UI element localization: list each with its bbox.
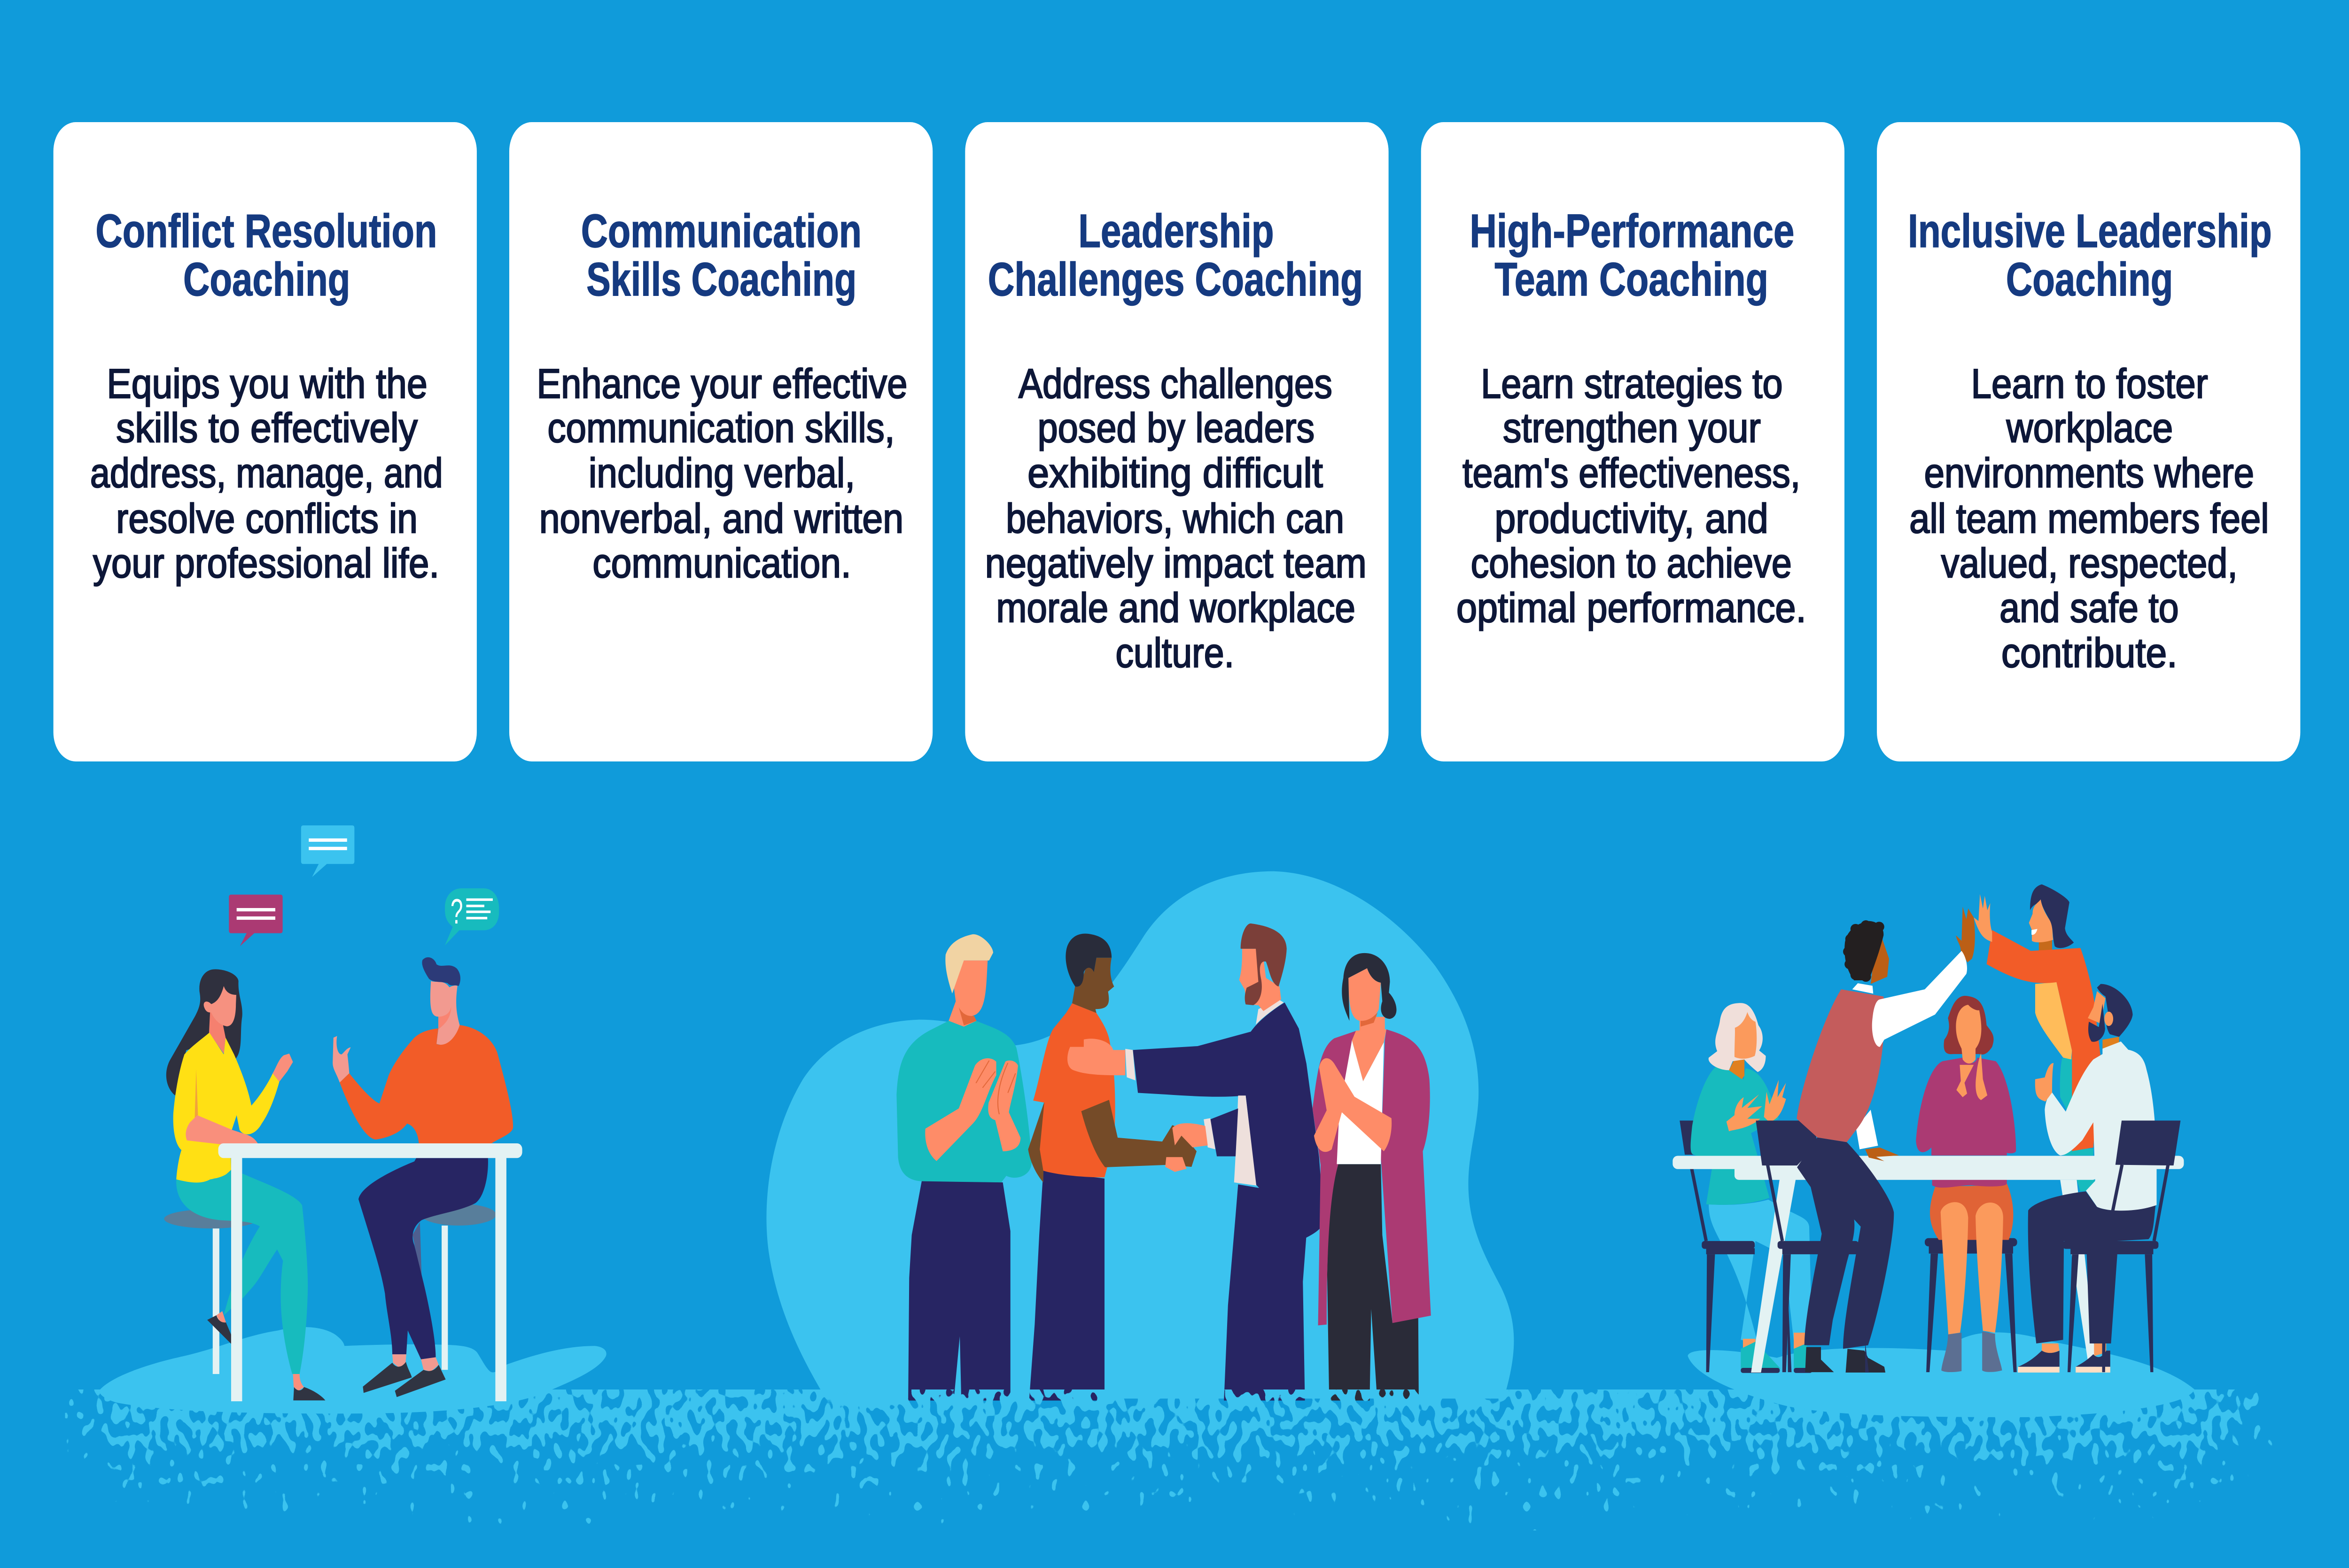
heading: leadership challenges coaching <box>988 204 1363 305</box>
man seated right, white shirt <box>2018 984 2180 1373</box>
table rear leg <box>2060 1180 2097 1373</box>
woman with magenta cardigan <box>1313 953 1431 1400</box>
man high-fiving, red vest <box>1756 907 1975 1373</box>
text: high-performance description <box>1456 360 1806 631</box>
man with orange shirt shaking hands <box>1028 933 1197 1400</box>
text: conflict resolution description: skills to effectively <box>116 404 418 451</box>
text: leadership challenges description: behaviors, which can <box>1006 495 1344 542</box>
heading: conflict resolution coaching: Coaching <box>183 253 350 305</box>
text: communication skills description: Enhance your effective <box>537 360 908 407</box>
text: communication skills description: nonverbal, and written <box>539 495 903 542</box>
text: high-performance description: team's effectiveness, <box>1462 450 1800 496</box>
heading: conflict resolution coaching: Conflict Resolution <box>95 204 437 257</box>
heading: inclusive leadership coaching: Inclusive Leadership <box>1908 204 2272 257</box>
text: leadership challenges description: exhibiting difficult <box>1027 450 1323 496</box>
text: leadership challenges description <box>985 360 1367 676</box>
speech bubble: purple <box>229 894 283 946</box>
text: conflict resolution description: Equips you with the <box>107 360 428 407</box>
panel: communication skills coaching <box>509 122 933 761</box>
speech bubble: blue <box>301 825 354 877</box>
text: conflict resolution description: resolve conflicts in <box>116 495 418 542</box>
long table top <box>1672 1156 2184 1373</box>
woman seated, yellow sweater <box>164 969 325 1400</box>
man seated, orange sweater <box>333 957 513 1397</box>
text: inclusive leadership description: all team members feel <box>1909 495 2269 542</box>
speech bubble: teal question <box>445 888 499 946</box>
text: leadership challenges description: morale and workplace <box>996 584 1355 631</box>
text: leadership challenges description: posed by leaders <box>1038 404 1315 451</box>
woman seated, centre, magenta sweater <box>1916 996 2017 1372</box>
speckled ground texture <box>65 1389 2276 1530</box>
panel: conflict resolution coaching <box>54 122 477 761</box>
heading: leadership challenges coaching: Leadership <box>1078 204 1274 257</box>
ground blob right <box>1688 1332 2194 1417</box>
panel: leadership challenges coaching <box>965 122 1389 761</box>
older woman seated, teal sweater <box>1680 1003 1812 1373</box>
table <box>218 1143 522 1401</box>
heading: high-performance team coaching: Team Coaching <box>1494 253 1768 305</box>
text: high-performance description: optimal performance. <box>1456 584 1806 631</box>
man with teal sweater clapping <box>896 934 1032 1400</box>
text: communication skills description: including verbal, <box>589 450 855 496</box>
heading: conflict resolution coaching <box>95 204 437 305</box>
heading: high-performance team coaching <box>1470 204 1794 305</box>
text: inclusive leadership description: Learn to foster <box>1971 360 2208 407</box>
background blob centre <box>766 871 1514 1398</box>
ground blob left <box>100 1327 607 1413</box>
woman high-fiving, orange top <box>1974 885 2100 1191</box>
text: high-performance description: Learn strategies to <box>1481 360 1783 407</box>
text: inclusive leadership description <box>1909 360 2269 676</box>
panel: inclusive leadership coaching <box>1877 122 2300 761</box>
text: leadership challenges description: culture. <box>1115 629 1234 676</box>
text: conflict resolution description: your professional life. <box>93 540 439 586</box>
text: inclusive leadership description: environments where <box>1924 450 2254 496</box>
text: high-performance description: strengthen your <box>1503 404 1761 451</box>
heading: communication skills coaching: Communication <box>581 204 862 257</box>
man in navy suit <box>1067 924 1324 1400</box>
text: inclusive leadership description: valued, respected, <box>1941 540 2238 586</box>
heading: high-performance team coaching: High-Performance <box>1470 204 1794 257</box>
heading: inclusive leadership coaching: Coaching <box>2006 253 2173 305</box>
text: inclusive leadership description: and safe to <box>1999 584 2179 631</box>
text: communication skills description <box>537 360 908 586</box>
text: leadership challenges description: Address challenges <box>1019 360 1332 407</box>
heading: leadership challenges coaching: Challenges Coaching <box>988 253 1363 305</box>
text: inclusive leadership description: workplace <box>2006 404 2173 451</box>
text: communication skills description: communication. <box>592 540 851 586</box>
illustration: two people talking at a table <box>100 825 607 1413</box>
panel: high-performance team coaching <box>1421 122 1844 761</box>
text: high-performance description: productivity, and <box>1494 495 1768 542</box>
heading: communication skills coaching: Skills Coaching <box>586 253 856 305</box>
heading: communication skills coaching <box>581 204 862 305</box>
text: communication skills description: communication skills, <box>547 404 895 451</box>
illustration: team high-five around a table <box>1672 885 2194 1417</box>
text: high-performance description: cohesion to achieve <box>1471 540 1792 586</box>
illustration: four people shaking hands <box>766 871 1514 1400</box>
speech bubble: teal question: ? <box>451 892 463 931</box>
text: inclusive leadership description: contribute. <box>2001 629 2178 676</box>
text: conflict resolution description: address, manage, and <box>90 450 443 496</box>
text: leadership challenges description: negatively impact team <box>985 540 1367 586</box>
text: conflict resolution description <box>90 360 443 586</box>
heading: inclusive leadership coaching <box>1908 204 2272 305</box>
